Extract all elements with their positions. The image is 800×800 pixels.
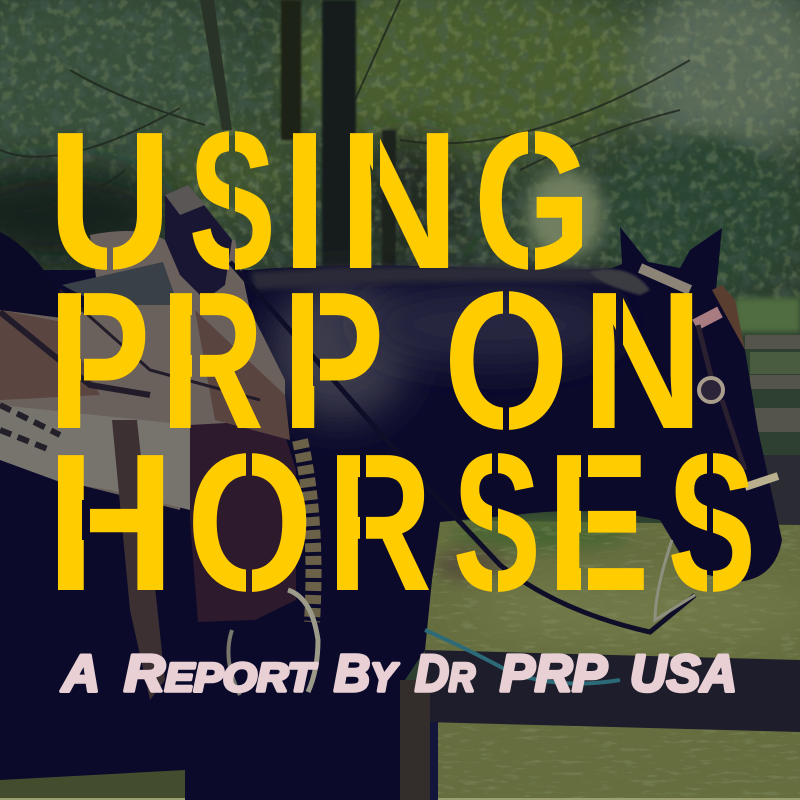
- title line 1: U: [47, 92, 173, 310]
- title line 1: G: [474, 91, 591, 311]
- subtitle: PRP: [500, 645, 607, 703]
- subtitle: REPORT: [124, 645, 318, 703]
- subtitle: A: [60, 645, 100, 703]
- subtitle: [60, 645, 737, 703]
- grass paddock: [0, 520, 800, 800]
- skirt: [190, 420, 296, 622]
- subtitle: BY: [334, 645, 399, 703]
- title line 1: [58, 131, 582, 270]
- stirrup strap: [112, 420, 165, 700]
- far fence right: [735, 298, 800, 525]
- title line 2: [58, 291, 692, 430]
- title line 2: P: [48, 251, 151, 470]
- title line 1: N: [339, 90, 459, 310]
- title line 1: I: [282, 90, 327, 310]
- title line 3: E: [547, 413, 650, 632]
- rope: [300, 440, 314, 622]
- stirrup: [288, 590, 318, 692]
- paddock fence rail: [400, 630, 800, 800]
- seat and fender: [0, 231, 285, 510]
- seat pad: [62, 262, 178, 305]
- bridle: [640, 268, 778, 620]
- title line 3: H: [46, 412, 175, 632]
- title line 3: [46, 412, 756, 632]
- title line 3: R: [327, 413, 432, 632]
- title line 2: P: [282, 251, 385, 470]
- title line 2: O: [443, 251, 569, 471]
- rein: [230, 262, 695, 632]
- title line 2: R: [160, 252, 264, 470]
- title line 2: N: [582, 250, 704, 470]
- title line 3: S: [452, 413, 541, 632]
- saddle: [0, 185, 695, 700]
- horse body: [0, 227, 782, 800]
- cantle: [0, 232, 60, 322]
- subtitle: USA: [630, 645, 737, 703]
- title line 1: S: [188, 92, 276, 310]
- straps: [0, 312, 150, 395]
- blanket: [0, 405, 190, 510]
- title line 3: S: [668, 413, 756, 632]
- title line 3: O: [186, 414, 313, 632]
- title: Using PRP on Horses: [58, 131, 751, 592]
- pommel: [165, 185, 232, 300]
- subtitle: DR: [415, 645, 475, 703]
